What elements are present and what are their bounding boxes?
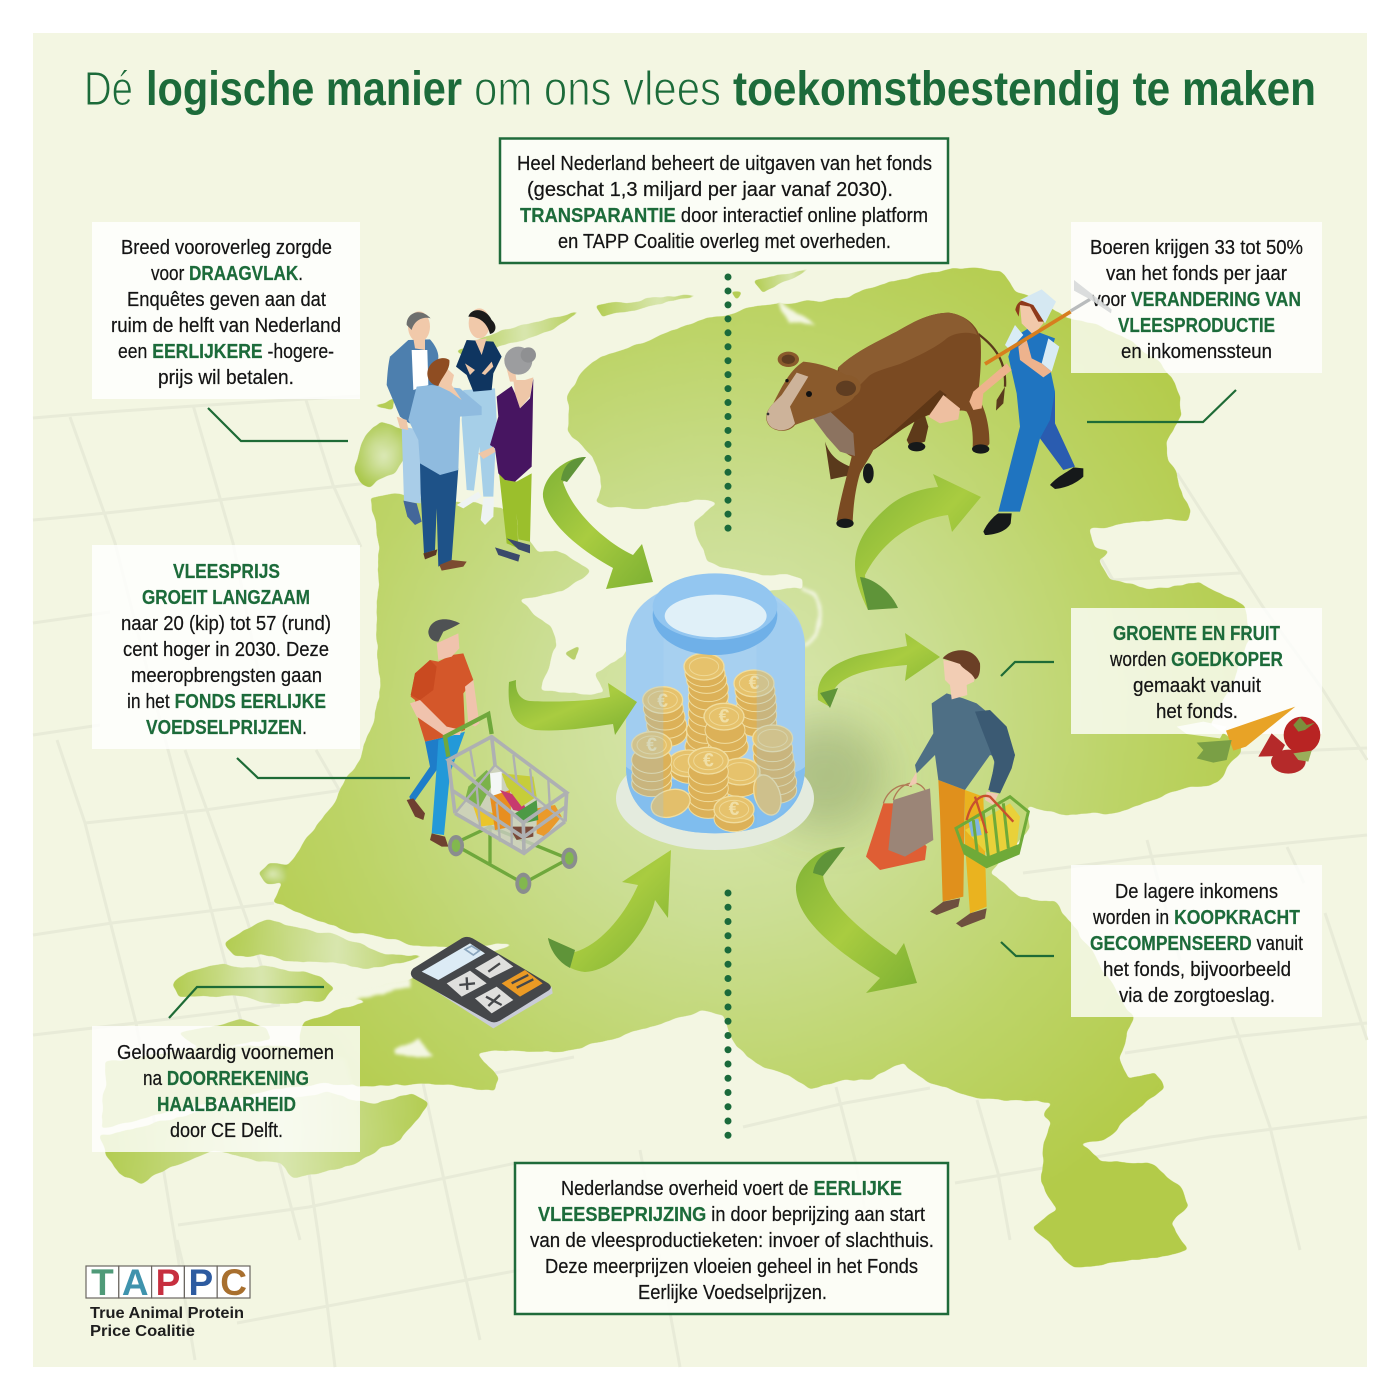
panel: doorrekening: na DOORREKENING: [143, 1068, 309, 1090]
arrow: shopper to jar: [509, 680, 637, 735]
panel: boeren: VLEESPRODUCTIE: [1118, 315, 1275, 337]
coins: €: [703, 750, 714, 771]
logo: TAPPC: P: [156, 1262, 180, 1303]
panel: groente en fruit: het fonds.: [1156, 701, 1238, 723]
panel: koopkracht: GECOMPENSEERD vanuit: [1090, 933, 1303, 955]
panel: groente en fruit: GROENTE EN FRUIT: [1113, 623, 1280, 645]
title: Dé: [84, 63, 133, 116]
panel: koopkracht: het fonds, bijvoorbeeld: [1103, 959, 1291, 981]
panel: fund transparency: [500, 138, 948, 263]
panel: draagvlak: voor DRAAGVLAK.: [151, 263, 303, 285]
panel: vleesprijs: meeropbrengsten gaan: [131, 665, 322, 687]
man on the phone: [408, 358, 482, 571]
logo: TAPPC: A: [122, 1262, 149, 1303]
logo: TAPPC: C: [220, 1262, 247, 1303]
sweater: [915, 693, 1015, 793]
panel: vleesprijs: GROEIT LANGZAAM: [142, 587, 310, 609]
panel: doorrekening: door CE Delft.: [170, 1120, 283, 1142]
legs: [938, 780, 965, 902]
logo: TAPPC: True Animal Protein: [90, 1305, 244, 1322]
panel: vleesprijs: VOEDSELPRIJZEN.: [146, 717, 307, 739]
panel: overheid: Deze meerprijzen vloeien geheel in het Fonds: [545, 1256, 918, 1278]
coins: €: [646, 735, 657, 756]
icon: farmer with pitchfork: [969, 280, 1112, 535]
trolley: [445, 714, 577, 894]
coins: €: [657, 691, 668, 712]
head: [943, 660, 977, 699]
dotted line bottom: [724, 893, 732, 1136]
panel: draagvlak: ruim de helft van Nederland: [111, 315, 341, 337]
icon: cow: [766, 313, 1005, 528]
panel: groente en fruit: [1071, 608, 1322, 734]
coins: €: [749, 673, 760, 694]
panel: fund transparency: Heel Nederland beheert de uitgaven van het fonds: [517, 153, 932, 175]
icon: vegetables: [1177, 707, 1320, 774]
panel: doorrekening: Geloofwaardig voornemen: [117, 1042, 334, 1064]
shopping bags: [866, 783, 933, 870]
panel: overheid: [515, 1163, 948, 1314]
carrot: [1226, 707, 1295, 751]
icon: shopper with trolley: [407, 619, 577, 894]
panel: koopkracht: De lagere inkomens: [1115, 881, 1278, 903]
panel: doorrekening: [92, 1026, 360, 1152]
icon: man with bags and basket: [866, 650, 1028, 927]
arrow: consumer to income: [796, 847, 917, 993]
coins: €: [729, 799, 740, 820]
panel: overheid: Nederlandse overheid voert de EERLIJKE: [561, 1178, 902, 1200]
logo: TAPPC: P: [188, 1262, 213, 1303]
panel: boeren: [1071, 222, 1322, 373]
panel: draagvlak: [92, 222, 360, 399]
title: toekomstbestendig te maken: [733, 63, 1316, 116]
icon: group of people: [387, 308, 536, 571]
arrow: jar to farmer: [855, 474, 981, 610]
panel: boeren: van het fonds per jaar: [1106, 263, 1287, 285]
panel: overheid: van de vleesproductieketen: invoer of slachthuis.: [530, 1230, 934, 1252]
panel: groente en fruit: worden GOEDKOPER: [1109, 649, 1283, 671]
panel: draagvlak: een EERLIJKERE -hogere-: [118, 341, 334, 363]
panel: vleesprijs: [92, 545, 360, 749]
woman in purple dress: [478, 347, 536, 562]
panel: groente en fruit: gemaakt vanuit: [1133, 675, 1261, 697]
connector lines: [169, 390, 1236, 1018]
panel: draagvlak: prijs wil betalen.: [158, 367, 294, 389]
panel: draagvlak: Breed vooroverleg zorgde: [121, 237, 332, 259]
basket: [956, 796, 1028, 867]
shopper: [407, 619, 479, 847]
coins: €: [719, 706, 730, 727]
panel: fund transparency: TRANSPARANTIE door interactief online platform: [520, 205, 928, 227]
panel: vleesprijs: cent hoger in 2030. Deze: [123, 639, 329, 661]
panel: vleesprijs: in het FONDS EERLIJKE: [127, 691, 326, 713]
icon: jar shadow: [765, 720, 885, 830]
arrow: people to jar: [543, 457, 653, 589]
logo: TAPPC: T: [91, 1262, 114, 1303]
panel: vleesprijs: naar 20 (kip) tot 57 (rund): [121, 613, 331, 635]
map of the Netherlands: [102, 266, 1250, 1268]
panel: boeren: voor VERANDERING VAN: [1092, 289, 1301, 311]
woman in navy top: [456, 308, 502, 525]
logo: TAPPC: [86, 1262, 250, 1340]
title: [84, 63, 1316, 116]
panel: fund transparency: en TAPP Coalitie overleg met overheden.: [558, 231, 891, 253]
panel: vleesprijs: VLEESPRIJS: [173, 561, 280, 583]
panel: koopkracht: worden in KOOPKRACHT: [1092, 907, 1300, 929]
title: om ons vlees: [474, 63, 721, 116]
tomato: [1258, 733, 1285, 757]
panel: overheid: Eerlijke Voedselprijzen.: [638, 1282, 827, 1304]
man with denim jacket: [387, 311, 438, 525]
panel: fund transparency: (geschat 1,3 miljard per jaar vanaf 2030).: [527, 179, 893, 201]
panel: boeren: Boeren krijgen 33 tot 50%: [1090, 237, 1303, 259]
panel: boeren: en inkomenssteun: [1121, 341, 1272, 363]
icon: calculator: [411, 937, 553, 1028]
icon: jar with euro coins: [616, 573, 814, 850]
panel: overheid: VLEESBEPRIJZING in door beprijzing aan start: [538, 1204, 925, 1226]
panel: koopkracht: [1071, 865, 1322, 1017]
dotted line top: [724, 277, 732, 542]
arrow: calculator to jar: [548, 850, 671, 972]
arrow: jar to consumer: [818, 633, 940, 708]
panel: doorrekening: HAALBAARHEID: [157, 1094, 296, 1116]
panel: draagvlak: Enquêtes geven aan dat: [127, 289, 326, 311]
map grid: [33, 396, 1367, 1367]
coins: [632, 653, 797, 832]
logo: TAPPC: Price Coalitie: [90, 1323, 195, 1340]
title: logische manier: [146, 63, 462, 116]
panel: koopkracht: via de zorgtoeslag.: [1119, 985, 1275, 1007]
